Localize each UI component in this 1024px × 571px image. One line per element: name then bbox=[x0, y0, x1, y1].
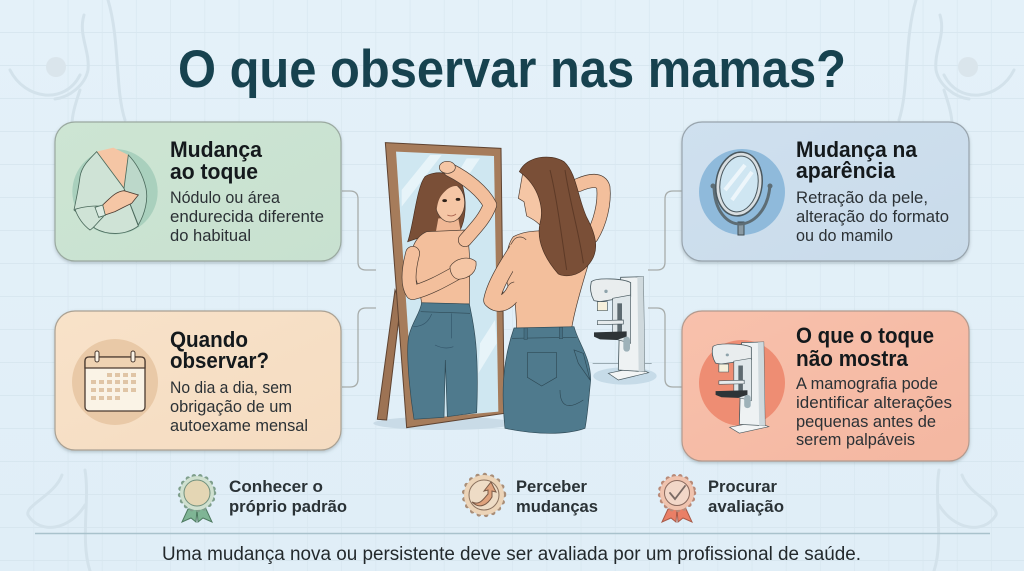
heading: Mudança bbox=[170, 137, 263, 162]
icon: orange seal with arrow bbox=[464, 475, 504, 515]
text: identificar alterações bbox=[796, 393, 952, 412]
heading: O que o toque bbox=[796, 323, 934, 348]
panel: mudança na aparência bbox=[682, 122, 969, 261]
heading bbox=[170, 137, 263, 184]
front arm bbox=[492, 245, 520, 303]
label: Conhecer o bbox=[229, 477, 323, 496]
text bbox=[796, 374, 952, 449]
heading bbox=[170, 327, 269, 373]
badge: procurar avaliação bbox=[660, 476, 784, 522]
text: serem palpáveis bbox=[796, 430, 915, 449]
label: próprio padrão bbox=[229, 497, 347, 516]
label: mudanças bbox=[516, 497, 598, 516]
footer note: Uma mudança nova ou persistente deve ser avaliada por um profissional de saúde. bbox=[162, 544, 861, 565]
text: do habitual bbox=[170, 226, 251, 245]
jeans bbox=[503, 327, 591, 433]
badge: conhecer o próprio padrão bbox=[180, 476, 347, 522]
label bbox=[708, 477, 784, 516]
jeans bbox=[408, 303, 477, 419]
heading: não mostra bbox=[796, 346, 909, 371]
floor shadow bbox=[373, 417, 513, 430]
text: Nódulo ou área bbox=[170, 188, 281, 207]
raised arm bbox=[450, 170, 490, 240]
heading: observar? bbox=[170, 348, 269, 373]
torso bbox=[505, 230, 597, 329]
raised arm bbox=[578, 181, 604, 237]
label: Perceber bbox=[516, 477, 587, 496]
text: obrigação de um bbox=[170, 397, 292, 416]
text: pequenas antes de bbox=[796, 412, 936, 431]
hair bbox=[519, 157, 596, 276]
heading bbox=[796, 137, 918, 183]
icon: red rosette with check bbox=[660, 476, 694, 522]
illustration: woman at mirror bbox=[373, 143, 657, 433]
icon: green rosette bbox=[180, 476, 214, 522]
connector lines bbox=[342, 191, 682, 387]
back-view figure bbox=[492, 157, 604, 433]
title: O que observar nas mamas? bbox=[178, 40, 846, 99]
heading: aparência bbox=[796, 158, 896, 183]
text: endurecida diferente bbox=[170, 207, 324, 226]
label bbox=[229, 477, 347, 516]
icon: round mirror bbox=[699, 149, 785, 235]
icon: hand on blouse bbox=[72, 148, 158, 234]
heading bbox=[796, 323, 934, 371]
panel: mudança ao toque bbox=[55, 122, 341, 261]
text bbox=[170, 188, 324, 245]
text: A mamografia pode bbox=[796, 374, 938, 393]
badge: perceber mudanças bbox=[464, 475, 598, 516]
text bbox=[796, 188, 949, 245]
text bbox=[170, 378, 308, 435]
text: No dia a dia, sem bbox=[170, 378, 292, 397]
mirror bbox=[377, 143, 504, 428]
reflection figure bbox=[408, 161, 490, 419]
heading: ao toque bbox=[170, 159, 258, 184]
lower arm bbox=[409, 253, 462, 293]
heading: Mudança na bbox=[796, 137, 918, 162]
label: Procurar bbox=[708, 477, 777, 496]
text: autoexame mensal bbox=[170, 416, 308, 435]
icon: mammography machine background bbox=[591, 277, 657, 385]
icon: calendar bbox=[72, 339, 158, 425]
label: avaliação bbox=[708, 497, 784, 516]
text: alteração do formato bbox=[796, 207, 949, 226]
text: Retração da pele, bbox=[796, 188, 928, 207]
panel: quando observar bbox=[55, 311, 341, 450]
text: ou do mamilo bbox=[796, 226, 893, 245]
head bbox=[518, 173, 547, 230]
icon: mammography machine bbox=[699, 340, 785, 433]
panel: o que o toque não mostra bbox=[682, 311, 969, 461]
heading: Quando bbox=[170, 327, 248, 352]
label bbox=[516, 477, 598, 516]
